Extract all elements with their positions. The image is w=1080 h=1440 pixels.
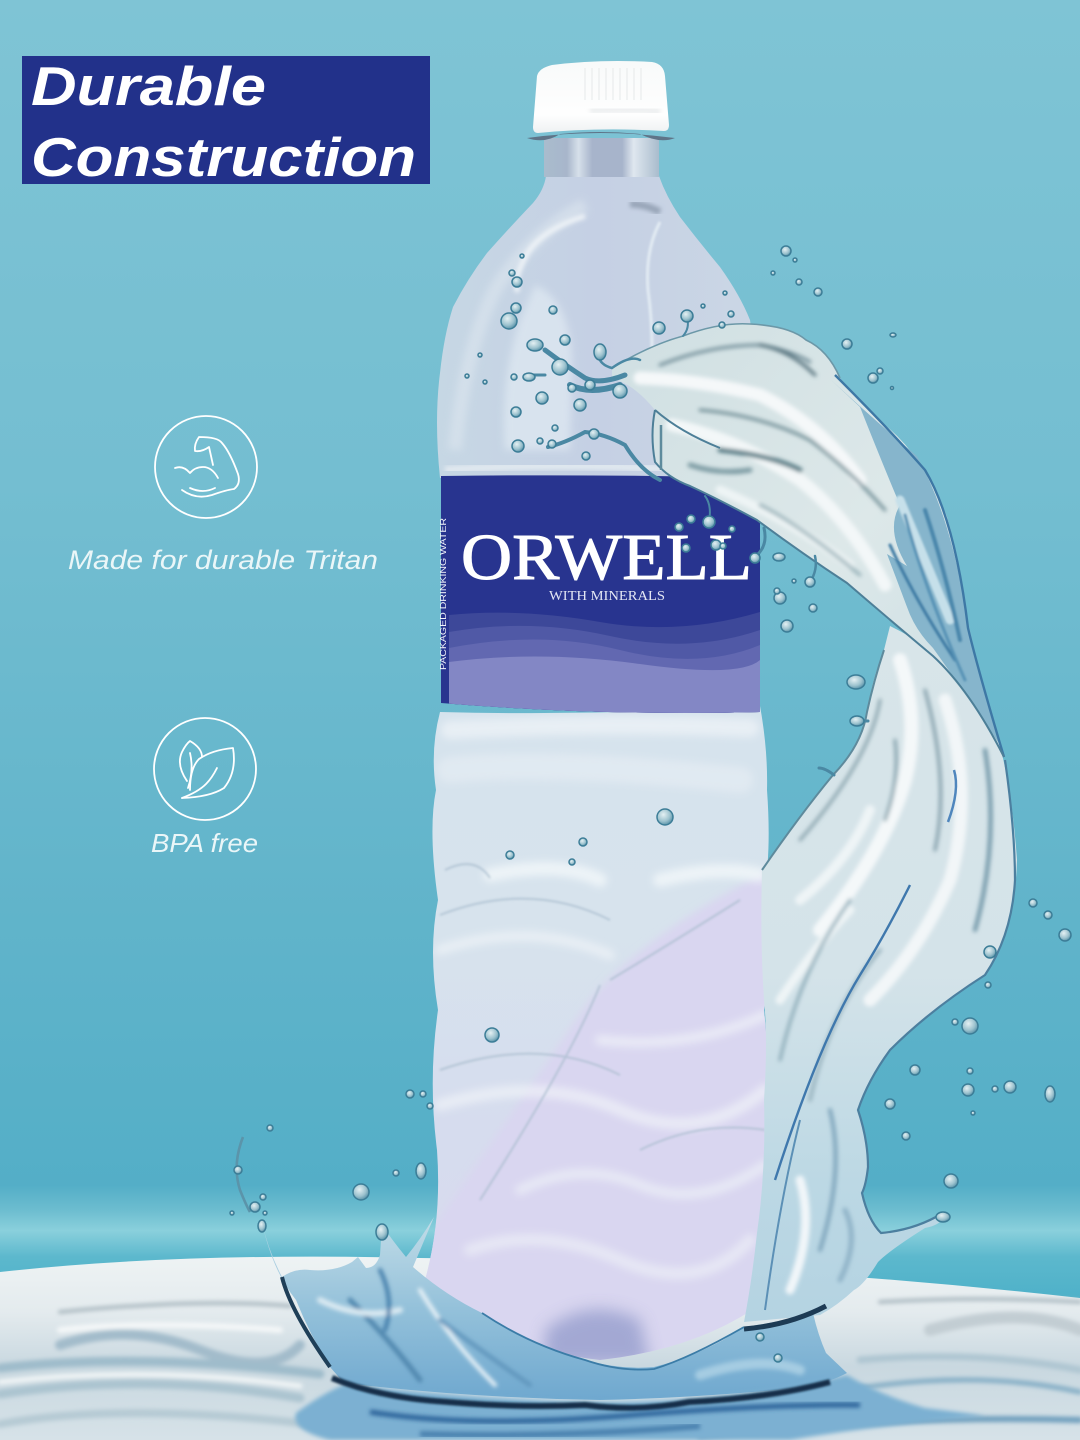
bottle neck — [544, 138, 659, 177]
brand subtitle: WITH MINERALS — [549, 588, 665, 603]
brand name: ORWELL — [461, 521, 752, 594]
water surface — [0, 1257, 1080, 1440]
icon: flexed arm — [155, 416, 257, 518]
bottle cap — [533, 61, 669, 133]
splash: pool at base — [295, 1375, 985, 1440]
splash: blue fold — [830, 379, 1000, 745]
label wave layers — [449, 612, 760, 720]
splash: left arc tendril — [237, 1137, 250, 1212]
splash: upper ribbon — [612, 324, 1004, 757]
bottle label — [438, 475, 760, 720]
water splash — [237, 318, 1017, 1440]
label side text: PACKAGED DRINKING WATER — [438, 518, 448, 670]
label: made for durable Tritan: Made for durable Tritan — [68, 545, 378, 575]
icon: leaves — [154, 718, 256, 820]
bottle collar — [527, 132, 675, 140]
feature: made for durable Tritan — [68, 416, 378, 575]
title banner: Durable — [31, 55, 266, 117]
water bottle — [425, 61, 775, 1365]
title banner: Construction — [31, 126, 416, 188]
title banner — [22, 55, 430, 188]
label: BPA free: BPA free — [151, 828, 258, 858]
feature: BPA free — [151, 718, 258, 858]
splash: lower column — [744, 626, 1017, 1322]
bottle shoulder — [437, 176, 760, 478]
splash: base crown — [262, 1217, 847, 1400]
water droplets — [230, 246, 1071, 1362]
horizon band — [0, 1185, 1080, 1305]
splash: tendrils on shoulder — [525, 318, 868, 775]
bottle body — [425, 706, 775, 1365]
